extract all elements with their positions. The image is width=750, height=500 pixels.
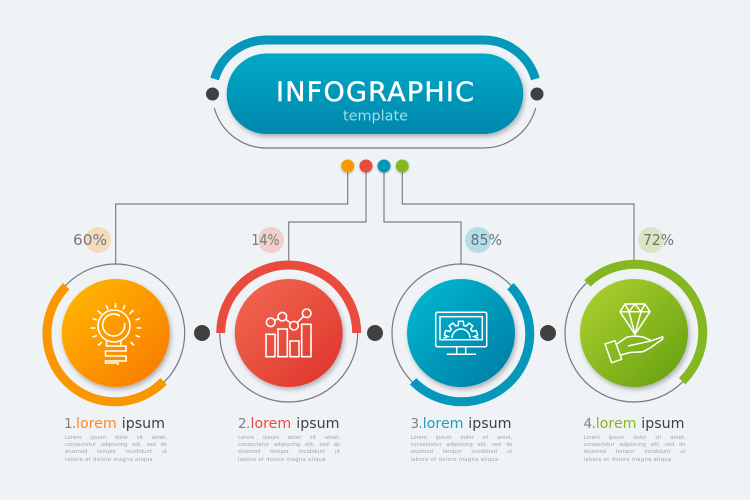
text block: step 3: Lorem ipsum dolor sit amet, bbox=[410, 435, 512, 441]
header lower thin arc bbox=[214, 108, 536, 148]
text block: step 1: 1. bbox=[64, 416, 76, 432]
text block: step 2: labore et dolore magna aliqua bbox=[238, 457, 326, 463]
percent label 85% bbox=[465, 227, 502, 253]
text block: step 4: lorem bbox=[596, 416, 636, 432]
text block: step 1 bbox=[64, 416, 167, 463]
percent label 72%: 72% bbox=[643, 231, 674, 249]
text block: step 2: Lorem ipsum dolor sit amet, bbox=[238, 435, 340, 441]
ring bbox=[565, 264, 703, 402]
header upper thick arc bbox=[215, 40, 535, 79]
disc bbox=[580, 279, 688, 387]
text block: step 2: consectetur adipiscing elit, sed do bbox=[238, 442, 340, 448]
text block: step 4: Lorem ipsum dolor sit amet, bbox=[584, 435, 686, 441]
disc bbox=[235, 279, 343, 387]
header right dot bbox=[530, 88, 544, 100]
text block: step 1: ipsum bbox=[122, 416, 165, 432]
text block: step 3 bbox=[410, 416, 512, 463]
text block: step 1: Lorem ipsum dolor sit amet, bbox=[65, 435, 167, 441]
percent label 85%: 85% bbox=[470, 231, 502, 249]
ring bbox=[47, 264, 185, 402]
text block: step 2: ipsum bbox=[296, 416, 339, 432]
separator dots bbox=[194, 325, 556, 341]
text block: step 2: lorem bbox=[250, 416, 291, 432]
percent label 60%: 60% bbox=[73, 231, 107, 249]
icon: bar chart with trend bbox=[266, 309, 311, 357]
percent label 14% bbox=[252, 227, 284, 253]
text block: step 4: labore et dolore magna aliqua bbox=[584, 457, 671, 463]
icon: light bulb bbox=[90, 303, 142, 365]
disc bbox=[407, 279, 515, 387]
subtitle: template bbox=[343, 108, 408, 124]
text block: step 3: ipsum bbox=[468, 416, 511, 432]
title pill bbox=[227, 54, 523, 134]
text block: step 4: eiusmod tempor incididunt ut bbox=[584, 449, 686, 455]
disc bbox=[62, 279, 170, 387]
text block: step 3: eiusmod tempor incididunt ut bbox=[410, 449, 512, 455]
text block: step 2: eiusmod tempor incididunt ut bbox=[238, 449, 340, 455]
percent label 72% bbox=[638, 227, 674, 253]
text block: step 2 bbox=[238, 416, 340, 463]
text block: step 4: ipsum bbox=[641, 416, 684, 432]
text block: step 4: consectetur adipiscing elit, sed do bbox=[584, 442, 686, 448]
progress arc bbox=[587, 264, 703, 381]
progress arc bbox=[221, 265, 357, 333]
text block: step 3: consectetur adipiscing elit, sed do bbox=[410, 442, 512, 448]
text block: step 3: lorem bbox=[423, 416, 464, 432]
text block: step 4: 4. bbox=[584, 416, 595, 432]
title: INFOGRAPHIC bbox=[276, 77, 474, 108]
text block: step 1: consectetur adipiscing elit, sed do bbox=[65, 442, 167, 448]
ring bbox=[392, 264, 530, 402]
percent label 60% bbox=[73, 227, 111, 253]
progress arc bbox=[413, 286, 530, 402]
text block: step 1: eiusmod tempor incididunt ut bbox=[65, 449, 167, 455]
text block: step 2: 2. bbox=[238, 416, 250, 432]
panel: step 1 gauge bbox=[47, 227, 185, 402]
icon: diamond in hand bbox=[605, 304, 663, 363]
text block: step 3: 3. bbox=[410, 416, 422, 432]
header: title pill with ring bbox=[206, 40, 544, 148]
header left dot bbox=[206, 88, 219, 100]
percent label 14%: 14% bbox=[252, 231, 280, 249]
panel: step 3 gauge bbox=[392, 227, 530, 402]
progress arc bbox=[47, 286, 164, 402]
connector lines bbox=[116, 166, 634, 264]
text block: step 4 bbox=[584, 416, 686, 463]
panel: step 2 gauge bbox=[220, 227, 358, 402]
colored connector dots bbox=[341, 160, 409, 172]
panel: step 4 gauge bbox=[565, 227, 703, 402]
text block: step 1: labore et dolore magna aliqua bbox=[65, 457, 153, 463]
ring bbox=[220, 264, 358, 402]
text block: step 1: lorem bbox=[76, 416, 117, 432]
text block: step 3: labore et dolore magna aliqua bbox=[410, 457, 498, 463]
icon: monitor with gear bbox=[436, 312, 487, 354]
